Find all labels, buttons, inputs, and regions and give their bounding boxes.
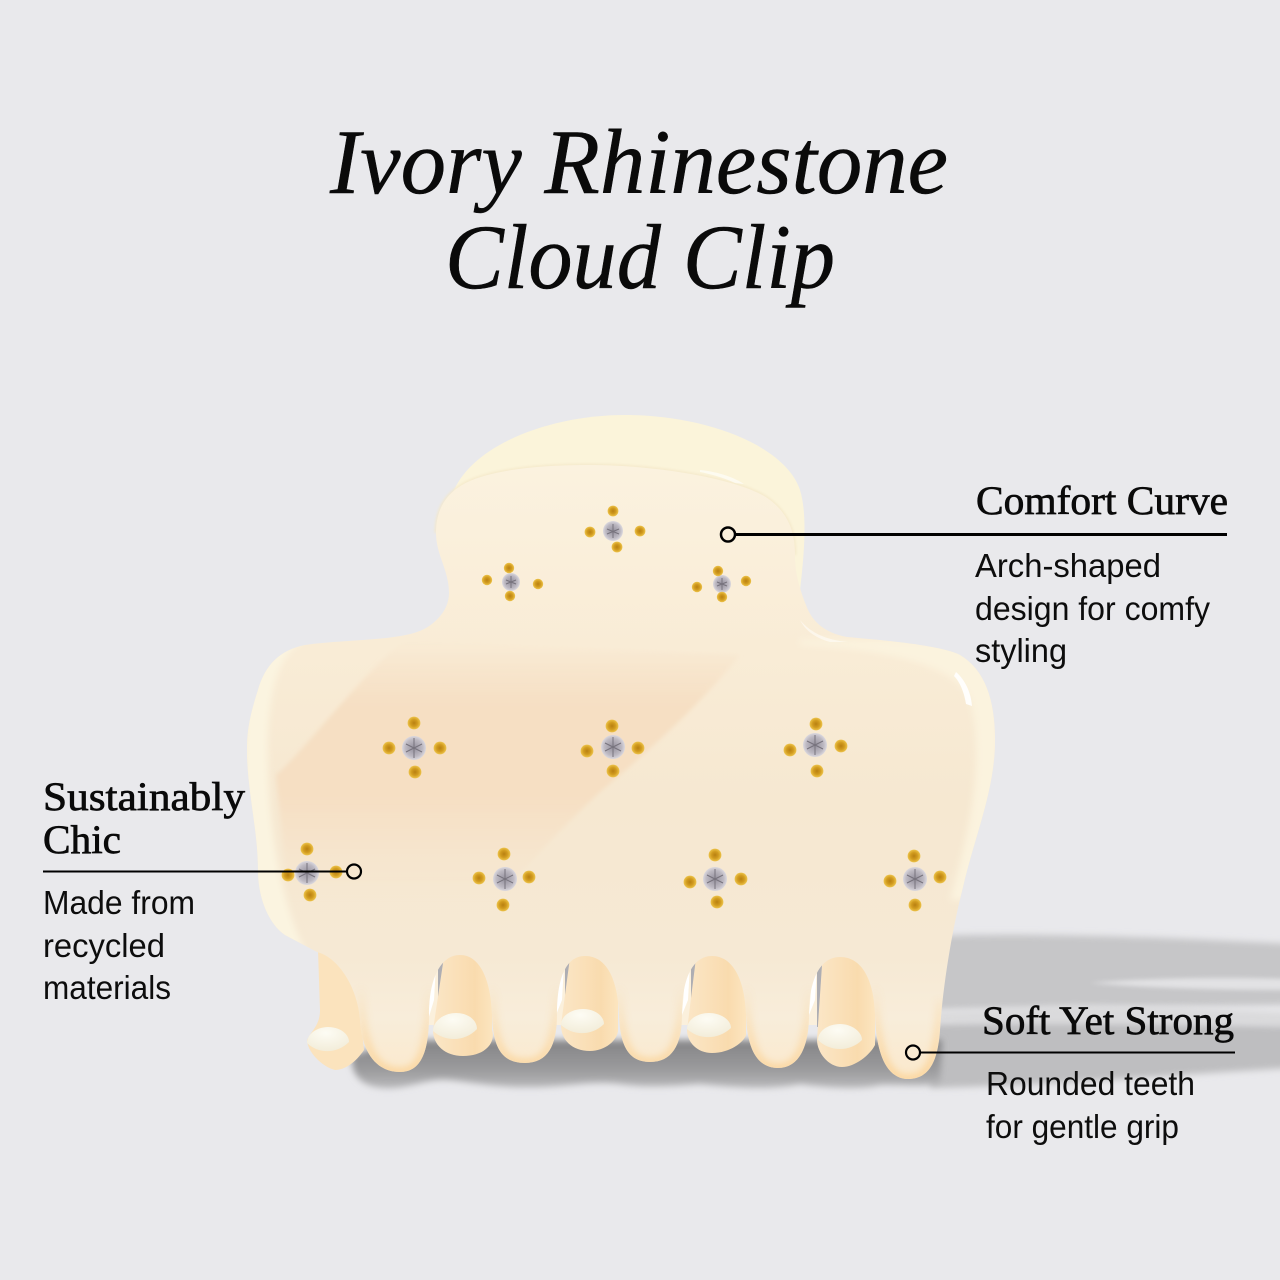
description: Made from: [43, 884, 195, 921]
title: [329, 111, 948, 308]
description: [975, 547, 1210, 669]
description: [43, 884, 195, 1006]
cluster: top right: [692, 566, 751, 602]
description: for gentle grip: [986, 1108, 1179, 1145]
cluster: bottom far right: [884, 850, 946, 911]
back teeth with pearl tips: [307, 950, 875, 1070]
description: styling: [975, 632, 1067, 669]
heading: Sustainably: [43, 774, 245, 819]
leader line: [906, 1046, 1235, 1060]
heading: Comfort Curve: [976, 478, 1228, 523]
leader line: [43, 864, 361, 878]
cluster: bottom far left: [282, 843, 342, 901]
leader line: [721, 528, 1227, 542]
title: Ivory Rhinestone: [329, 111, 948, 213]
tonal shading on body: [240, 640, 1000, 1079]
description: recycled: [43, 927, 165, 964]
cluster: middle right: [784, 718, 847, 777]
heading: Soft Yet Strong: [982, 998, 1234, 1043]
front body with teeth: [247, 465, 995, 1079]
description: design for comfy: [975, 590, 1210, 627]
callout: Comfort Curve: [721, 478, 1228, 669]
soft rim between back arch and front plate: [436, 465, 795, 555]
pearl tips: [307, 1009, 862, 1051]
description: [986, 1065, 1195, 1145]
description: Arch-shaped: [975, 547, 1161, 584]
cluster: top left: [482, 563, 543, 601]
description: materials: [43, 969, 171, 1006]
description: Rounded teeth: [986, 1065, 1195, 1102]
back arch of the clip: [450, 415, 804, 590]
heading: Chic: [43, 817, 121, 862]
cast shadow of the clip: [352, 935, 1280, 1088]
gaps behind the teeth: [424, 955, 826, 1027]
cluster: top centre: [585, 506, 645, 552]
title: Cloud Clip: [445, 206, 835, 308]
glaze highlights: [700, 470, 972, 706]
cluster: bottom left: [473, 848, 535, 911]
callout: Sustainably Chic: [43, 774, 361, 1006]
callout: Soft Yet Strong: [906, 998, 1235, 1145]
cluster: middle left: [383, 717, 446, 778]
heading: [43, 774, 245, 862]
clip: product illustration: [240, 415, 1000, 1079]
cluster: bottom right: [684, 849, 747, 908]
cluster: middle centre: [581, 720, 644, 777]
rhinestone clusters: [282, 506, 946, 911]
